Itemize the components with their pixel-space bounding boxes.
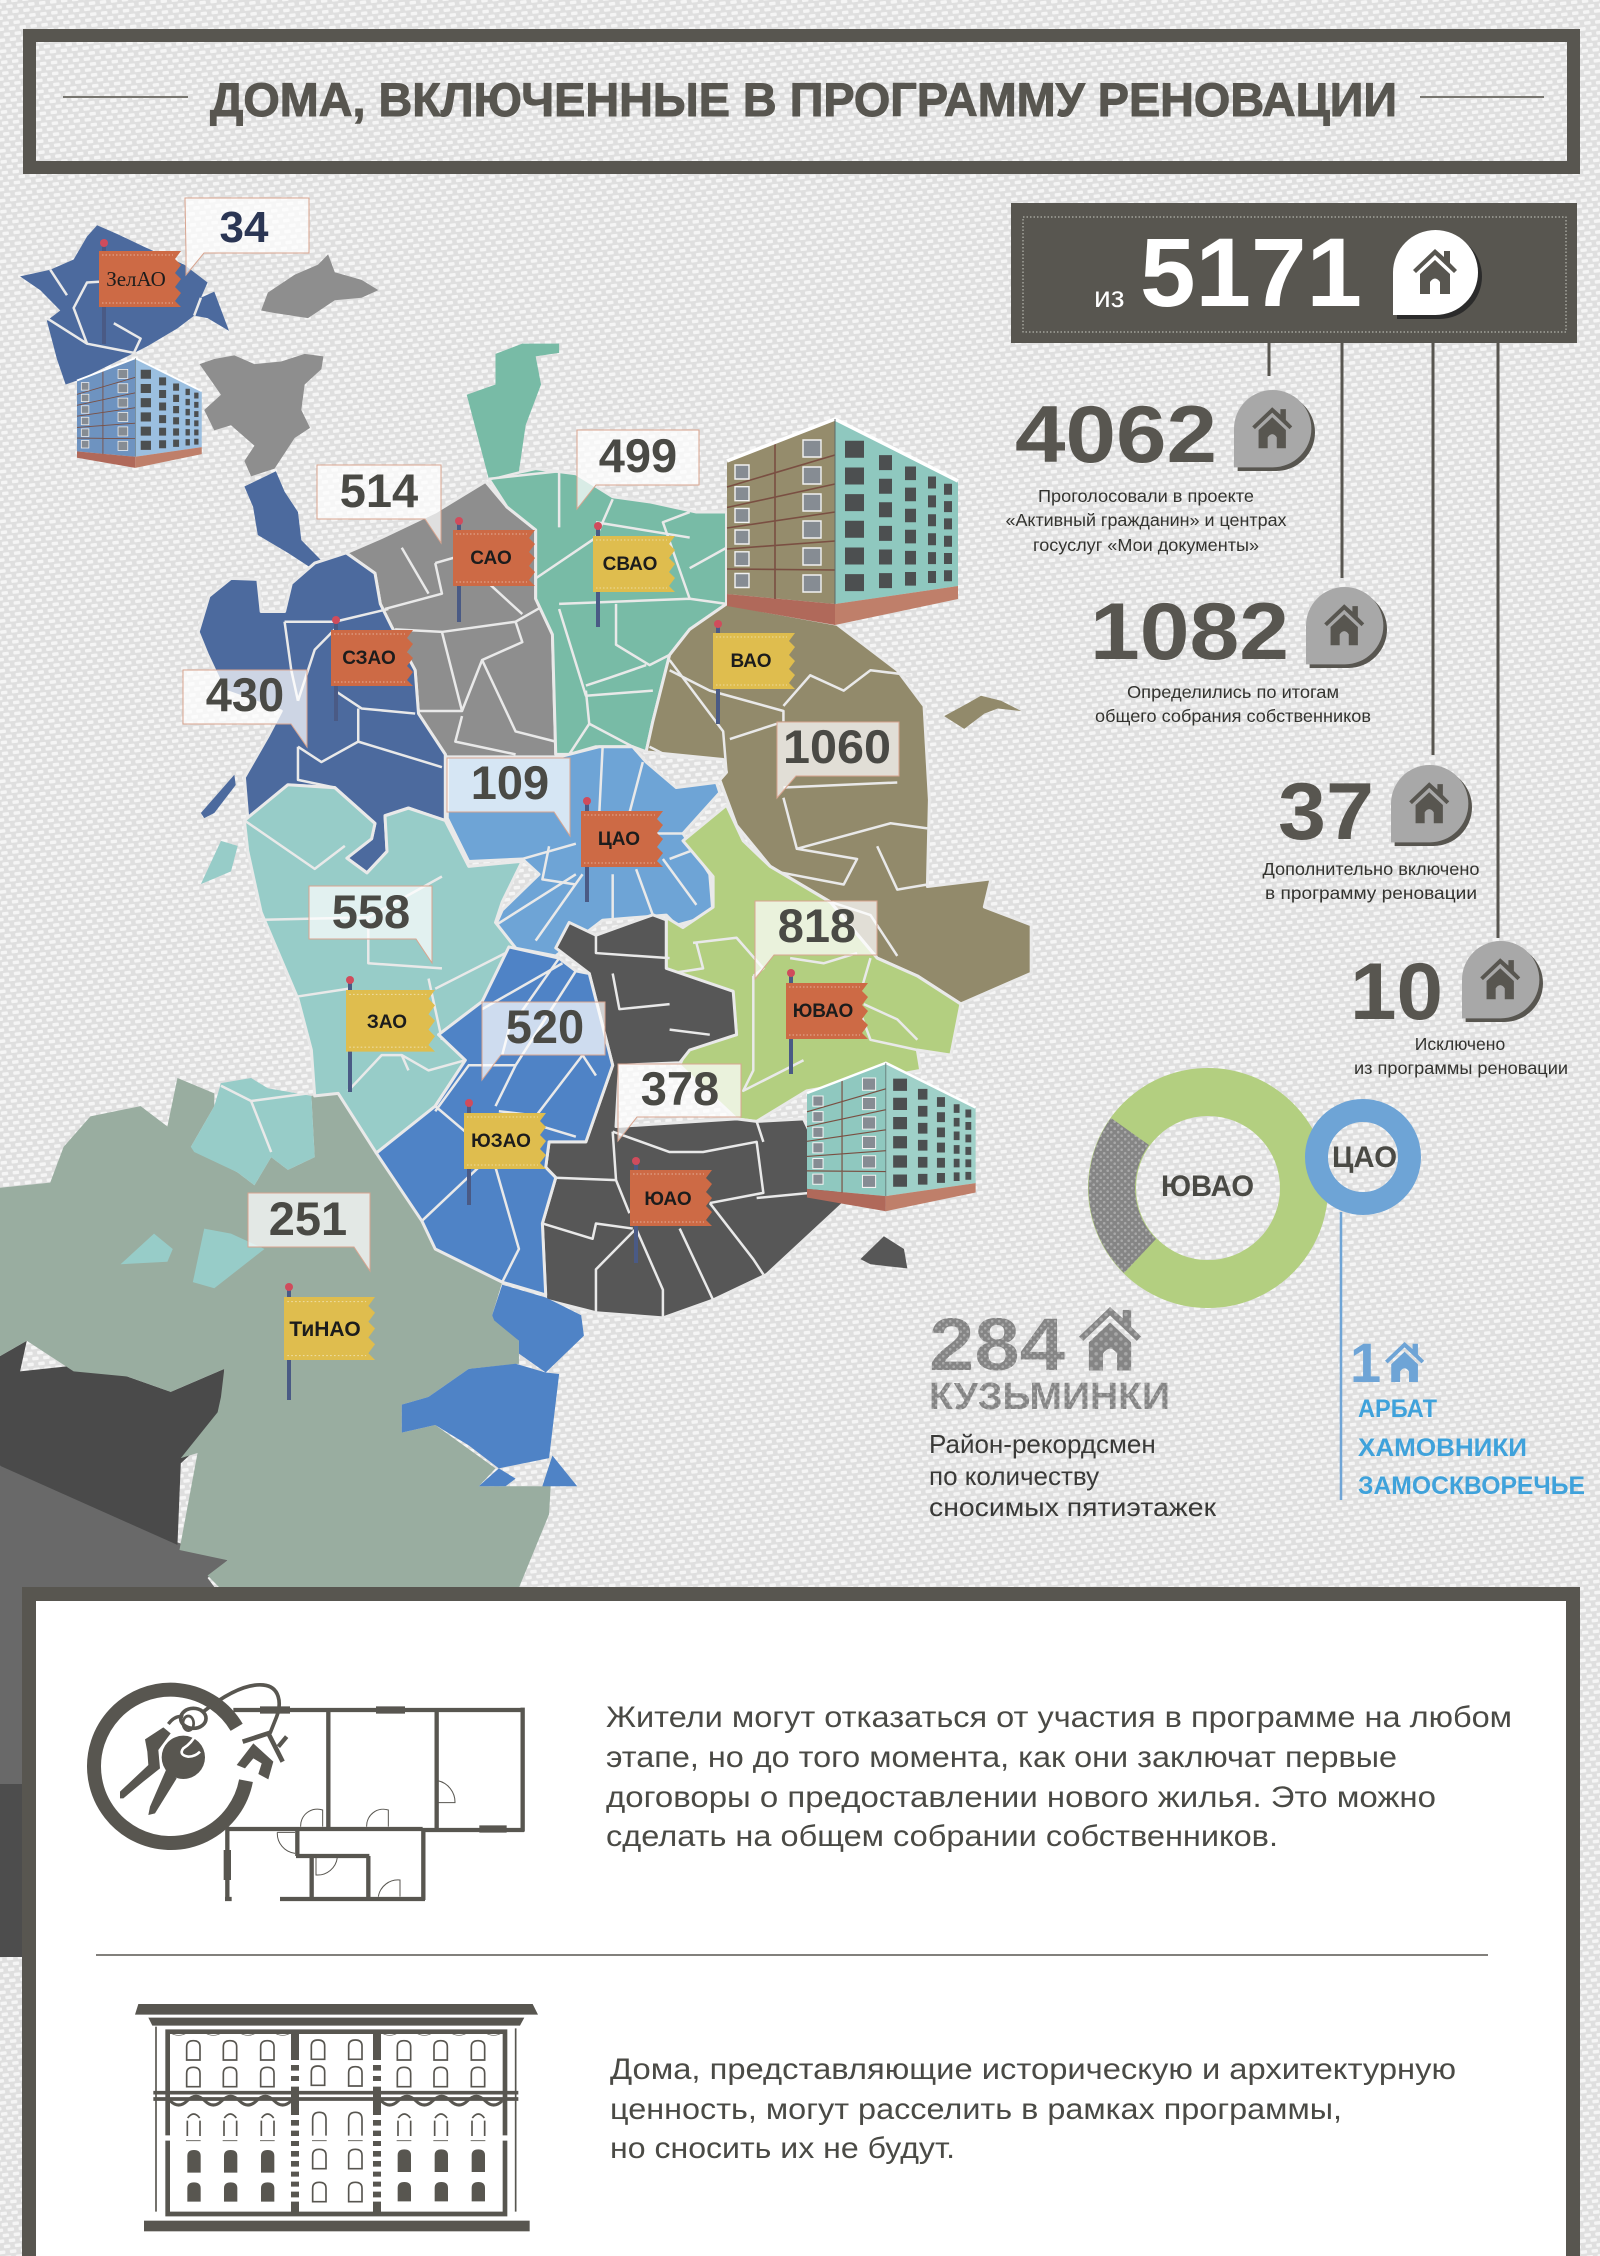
callout: 558 [309,885,432,963]
map of Moscow districts [0,225,1031,1957]
stat: 37: Дополнительно включено [1262,859,1480,879]
callout: 251 [248,1192,370,1271]
stat: 10: Исключено [1415,1034,1505,1054]
text: heritage [610,2053,1456,2165]
record: Кузьминки: Район-рекордсмен [929,1429,1156,1459]
upper districts [20,225,1031,1004]
flag: ЦАО: ЦАО [598,829,640,850]
callout: 430: 430 [206,668,284,721]
minimum: 1 house: 1 [1350,1331,1381,1394]
stat: 4062: «Активный гражданин» и центрах [1006,510,1287,530]
flag: ЗАО: ЗАО [367,1012,407,1033]
district: ЮЗАО [376,947,613,1295]
minimum: 1 house: ХАМОВНИКИ [1358,1434,1527,1462]
minimum: 1 house: АРБАТ [1358,1395,1437,1423]
record: Кузьминки: 284 [929,1303,1065,1386]
district: ТиНАО [0,1078,552,1596]
icon: historic building [135,2004,538,2231]
callout: 109 [447,756,570,836]
callout: 499: 499 [599,429,677,482]
left edge wedge [0,1466,22,1957]
flag: ЮЗАО: ЮЗАО [471,1131,531,1152]
total box: 5171 [1140,218,1362,327]
bottom panel [22,1587,1580,2256]
text: refusal [606,1701,1512,1853]
minimum: 1 house [1350,1331,1585,1500]
donut: ЮВАО [1089,1092,1304,1284]
minimum: 1 house: ЗАМОСКВОРЕЧЬЕ [1358,1472,1585,1500]
flag: ТиНАО: ТиНАО [289,1318,361,1341]
flag: ЗелАО [99,239,181,344]
icon: white house pin [1393,230,1482,319]
building: ЗелАО [77,358,202,468]
flag: ВАО: ВАО [730,651,772,672]
text: refusal: этапе, но до того момента, как они заключат первые [606,1741,1397,1774]
flag: СЗАО: СЗАО [342,648,396,669]
callout: 818: 818 [778,899,856,952]
callout: 34: 34 [220,203,269,252]
stat: 1082: Определились по итогам [1127,682,1339,702]
district: ЗАО [244,785,522,1153]
stat: 1082: общего собрания собственников [1095,706,1371,726]
flag: САО: САО [470,548,512,569]
flag: ЮВАО [786,969,868,1074]
stat: 4062: Проголосовали в проекте [1038,486,1254,506]
text: refusal: сделать на общем собрании собственников. [606,1820,1278,1853]
flag: САО [453,517,535,622]
stat: 10: из программы реновации [1354,1058,1568,1078]
callout: 251: 251 [269,1192,347,1245]
lower districts [244,785,961,1486]
record: Кузьминки [929,1303,1217,1522]
total box [1011,203,1577,343]
text: heritage: но сносить их не будут. [610,2132,955,2165]
callout: 520 [482,1000,605,1080]
flag: СЗАО [331,616,413,721]
callout: 34 [185,198,309,275]
callout: 499 [577,429,699,509]
flag: ЗелАО: ЗелАО [106,267,166,291]
district: САО [346,481,562,759]
flag: ЦАО [581,797,663,902]
record: Кузьминки: КУЗЬМИНКИ [929,1376,1170,1418]
new territories [0,841,907,1596]
callout: 1060 [777,720,899,798]
record: Кузьминки: по количеству [929,1461,1099,1491]
text: refusal: договоры о предоставлении нового жилья. Это можно [606,1781,1436,1814]
icon: keys and floor plan [94,1685,524,1901]
title: ДОМА, ВКЛЮЧЕННЫЕ В ПРОГРАММУ РЕНОВАЦИИ [210,73,1397,126]
stat: 37: 37 [1278,767,1374,857]
dark territory [0,1341,224,1545]
stat: 10: 10 [1350,947,1443,1037]
callout: 558: 558 [332,885,410,938]
stat: 4062: госуслуг «Мои документы» [1033,535,1259,555]
callout: 109: 109 [471,756,549,809]
record: Кузьминки: сносимых пятиэтажек [929,1492,1217,1522]
flag: ТиНАО [284,1283,375,1400]
connector lines [1269,343,1498,938]
callout: 378 [618,1062,741,1141]
text: heritage: Дома, представляющие историческую и архитектурную [610,2053,1456,2086]
callout: 514: 514 [340,464,418,517]
flag: ЗАО [346,976,435,1092]
callout: 430 [183,668,307,747]
СЗАО strips [244,471,321,568]
outer grey wedge [0,1466,228,1596]
title panel [30,36,1574,168]
stat: 10 [1350,941,1568,1078]
donut: ЮВАО: ЮВАО [1161,1170,1254,1203]
district: ЮАО [542,915,844,1318]
stat: 4062: 4062 [1015,390,1217,480]
ring: ЦАО [1316,1110,1410,1500]
stat: 1082 [1090,587,1387,726]
stat: 1082: 1082 [1090,587,1289,677]
callout: 378: 378 [641,1062,719,1115]
building: big [727,419,958,625]
ring: ЦАО: ЦАО [1332,1141,1397,1174]
ЗАО exclave [191,1078,315,1185]
flag: СВАО: СВАО [603,554,657,575]
district: СВАО [489,469,727,754]
stat: 37: в программу реновации [1265,883,1477,903]
stat: 4062 [1006,390,1315,555]
callout: 818 [755,899,877,979]
text: refusal: Жители могут отказаться от участия в программе на любом [606,1701,1512,1734]
flag: ЮВАО: ЮВАО [793,1001,853,1022]
district: ЗелАО [20,225,229,384]
building: small [807,1063,976,1211]
callout: 520: 520 [506,1000,584,1053]
flag: ЮАО: ЮАО [644,1189,692,1210]
district: ЮВАО [666,805,961,1121]
district: СЗАО [198,553,445,873]
flag: ВАО [713,620,795,724]
district: ВАО [646,604,1031,1004]
flag: ЮЗАО [464,1099,546,1205]
stat: 37 [1262,765,1480,903]
flag: СВАО [593,522,675,627]
flag: ЮАО [630,1157,712,1263]
ЮЗАО southern lobes [402,1285,584,1486]
callout: 1060: 1060 [783,720,891,773]
district: ЦАО [447,747,720,956]
text: heritage: ценность, могут расселить в рамках программы, [610,2093,1342,2126]
total number: из [1094,281,1125,314]
grey islands [261,254,378,318]
islands [121,1229,264,1288]
callout: 514 [317,464,441,543]
